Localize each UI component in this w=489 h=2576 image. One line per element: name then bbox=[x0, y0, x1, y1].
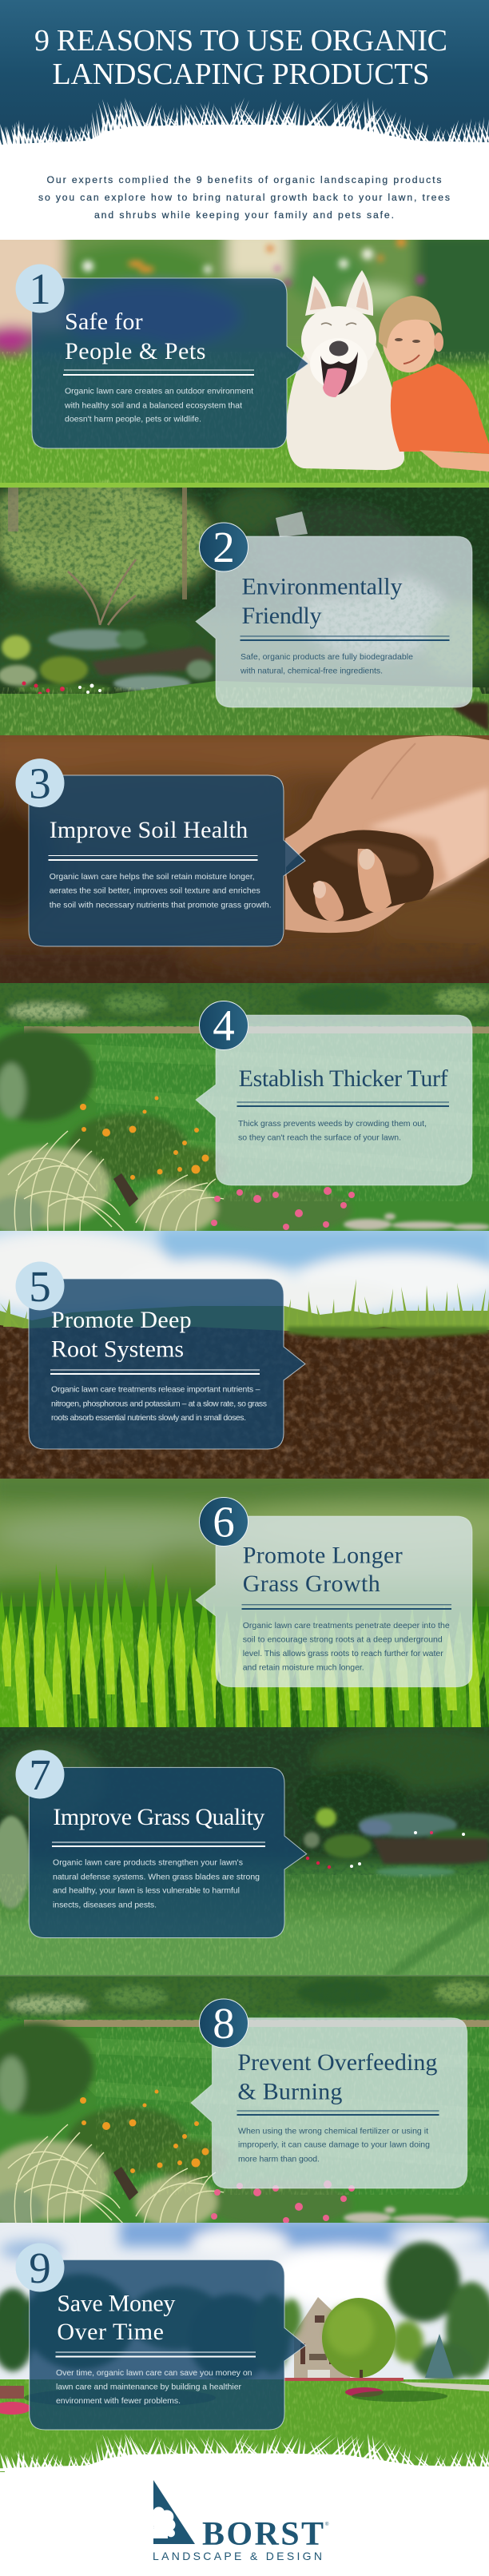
logo wordmark bbox=[153, 2516, 329, 2562]
body text bbox=[53, 1857, 260, 1910]
number badge 5 bbox=[16, 1261, 64, 1311]
ornamental grass strands bbox=[8, 1131, 224, 1231]
photo: wooded garden and lawn bbox=[0, 1718, 489, 1990]
body text: the soil with necessary nutrients that promote grass growth. bbox=[50, 900, 272, 910]
hand bbox=[285, 735, 489, 933]
logo wordmark: BORST bbox=[202, 2516, 324, 2553]
heading bbox=[241, 574, 403, 629]
heading: Safe for bbox=[65, 309, 143, 335]
number badge 3: 3 bbox=[29, 759, 51, 808]
body text bbox=[240, 652, 413, 675]
bright lime blades bbox=[2, 1599, 481, 1727]
body text: with healthy soil and a balanced ecosystem that bbox=[64, 401, 242, 411]
photo: striped lawn and flower bed bbox=[0, 1973, 489, 2228]
heading: Prevent Overfeeding bbox=[237, 2049, 437, 2076]
body text: Thick grass prevents weeds by crowding them out, bbox=[238, 1119, 427, 1129]
number badge 9 bbox=[16, 2243, 64, 2292]
body text: more harm than good. bbox=[238, 2155, 320, 2164]
body text: Organic lawn care treatments release important nutrients – bbox=[51, 1384, 260, 1394]
body text: insects, diseases and pests. bbox=[53, 1901, 157, 1910]
photo: sky, grass and soil cross-section bbox=[0, 1227, 489, 1479]
photo: house with trees and lawn bbox=[0, 2218, 489, 2472]
heading: Grass Growth bbox=[243, 1571, 380, 1597]
grass silhouette bbox=[0, 98, 489, 152]
callout: save money over time bbox=[16, 2243, 305, 2430]
title: LANDSCAPING PRODUCTS bbox=[53, 58, 430, 91]
callout: improve grass quality bbox=[16, 1750, 307, 1937]
number badge 8 bbox=[200, 1999, 248, 2048]
number badge 8: 8 bbox=[213, 1999, 235, 2048]
heading: & Burning bbox=[237, 2078, 342, 2104]
number badge 5: 5 bbox=[29, 1262, 51, 1311]
body text: Safe, organic products are fully biodegradable bbox=[241, 652, 413, 662]
heading bbox=[51, 1307, 192, 1362]
footer grass silhouette bbox=[0, 2433, 489, 2473]
house bbox=[294, 2297, 352, 2386]
mid green blades bbox=[0, 1563, 489, 1727]
callout: establish thicker turf bbox=[196, 1001, 472, 1185]
body text bbox=[51, 1384, 267, 1423]
intro text: so you can explore how to bring natural growth back to your lawn, trees bbox=[38, 192, 450, 203]
boy bbox=[379, 296, 489, 472]
body text: and healthy, your lawn is less vulnerable to harmful bbox=[53, 1886, 240, 1896]
body text: nitrogen, phosphorous and potassium – at a slow rate, so grass bbox=[51, 1399, 267, 1408]
body text: environment with fewer problems. bbox=[56, 2396, 181, 2406]
heading: Promote Longer bbox=[243, 1543, 403, 1568]
logo wordmark: LANDSCAPE & DESIGN bbox=[153, 2550, 322, 2562]
body text: improperly, it can cause damage to your lawn doing bbox=[238, 2140, 430, 2150]
photo: close-up of tall grass blades bbox=[0, 1471, 489, 1742]
number badge 4: 4 bbox=[213, 1001, 235, 1050]
title: 9 REASONS TO USE ORGANIC bbox=[34, 24, 447, 58]
heading bbox=[65, 309, 205, 364]
panel: reason 3 improve soil health bbox=[0, 735, 489, 983]
callout: promote longer grass growth bbox=[196, 1498, 472, 1687]
body text bbox=[238, 2126, 430, 2164]
body text: with natural, chemical-free ingredients. bbox=[240, 666, 383, 675]
body text: lawn care and maintenance by building a healthier bbox=[56, 2382, 241, 2391]
body text bbox=[56, 2368, 252, 2406]
panel: reason 7 improve grass quality bbox=[0, 1727, 489, 1975]
logo: Borst Landscape & Design bbox=[153, 2480, 329, 2562]
body text bbox=[238, 1119, 427, 1143]
logo wordmark: ® bbox=[325, 2522, 329, 2527]
body text bbox=[243, 1621, 450, 1672]
intro text: and shrubs while keeping your family and pets safe. bbox=[94, 209, 394, 221]
number badge 1 bbox=[16, 264, 64, 313]
number badge 7: 7 bbox=[29, 1750, 51, 1799]
callout: environmentally friendly bbox=[196, 523, 472, 707]
number badge 6: 6 bbox=[213, 1498, 235, 1546]
heading bbox=[237, 2049, 437, 2104]
heading: Promote Deep bbox=[51, 1307, 192, 1333]
number badge 1: 1 bbox=[29, 265, 51, 313]
dark shadow blades bbox=[29, 1638, 489, 1727]
panel: reason 4 establish thicker turf bbox=[0, 983, 489, 1231]
body text bbox=[50, 872, 272, 910]
number badge 7 bbox=[16, 1750, 64, 1799]
photo: garden with tree and stone wall bbox=[0, 480, 489, 735]
panel: reason 6 promote longer grass growth bbox=[0, 1479, 489, 1727]
body text: so they can't reach the surface of your lawn. bbox=[238, 1133, 401, 1143]
heading bbox=[243, 1543, 403, 1597]
intro text bbox=[38, 174, 450, 221]
body text: Organic lawn care helps the soil retain moisture longer, bbox=[50, 872, 255, 882]
intro text: Our experts complied the 9 benefits of organic landscaping products bbox=[46, 174, 441, 185]
body text bbox=[64, 387, 253, 424]
callout: prevent overfeeding and burning bbox=[191, 1999, 467, 2188]
heading: Establish Thicker Turf bbox=[239, 1065, 448, 1092]
number badge 2: 2 bbox=[213, 523, 235, 571]
heading: People & Pets bbox=[65, 338, 205, 364]
panel: reason 5 promote deep root systems bbox=[0, 1231, 489, 1479]
callout: improve soil health bbox=[16, 758, 305, 946]
photo: striped lawn and flower bed bbox=[0, 979, 489, 1235]
callout: safe for people and pets bbox=[16, 264, 308, 448]
number badge 2 bbox=[200, 523, 248, 571]
logo mark: triangle with tree bbox=[150, 2480, 195, 2546]
body text: natural defense systems. When grass blades are strong bbox=[53, 1872, 260, 1881]
body text: level. This allows grass roots to reach further for water bbox=[243, 1649, 443, 1658]
panel: reason 8 prevent overfeeding and burning bbox=[0, 1975, 489, 2223]
body text: Organic lawn care treatments penetrate deeper into the bbox=[243, 1621, 450, 1630]
heading: Improve Grass Quality bbox=[53, 1804, 264, 1830]
title bbox=[34, 24, 447, 91]
panel: reason 2 environmentally friendly bbox=[0, 488, 489, 735]
photo: dog and boy on lawn bbox=[0, 228, 489, 488]
header banner bbox=[0, 0, 489, 221]
body text: doesn't harm people, pets or wildlife. bbox=[65, 414, 201, 424]
body text: When using the wrong chemical fertilizer or using it bbox=[238, 2126, 428, 2136]
body text: Over time, organic lawn care can save you money on bbox=[56, 2368, 252, 2378]
body text: roots absorb essential nutrients slowly and in small doses. bbox=[51, 1413, 246, 1423]
photo: hand holding soil bbox=[0, 727, 489, 995]
body text: soil to encourage strong roots at a deep underground bbox=[243, 1635, 443, 1645]
heading: Save Money bbox=[57, 2291, 175, 2317]
body text: Organic lawn care products strengthen your lawn's bbox=[53, 1857, 243, 1867]
body text: Organic lawn care creates an outdoor environment bbox=[65, 387, 253, 396]
heading: Environmentally bbox=[241, 574, 403, 600]
heading bbox=[57, 2291, 175, 2345]
heading: Improve Soil Health bbox=[50, 817, 248, 843]
heading: Root Systems bbox=[51, 1336, 184, 1362]
panel: reason 9 save money over time bbox=[0, 2223, 489, 2472]
heading: Friendly bbox=[241, 603, 321, 629]
heading: Over Time bbox=[57, 2319, 164, 2345]
number badge 4 bbox=[200, 1001, 248, 1050]
body text: aerates the soil better, improves soil texture and enriches bbox=[50, 886, 260, 895]
dog bbox=[286, 270, 404, 470]
body text: and retain moisture much longer. bbox=[243, 1662, 364, 1672]
callout: promote deep root systems bbox=[16, 1261, 305, 1449]
panel: reason 1 safe for people and pets bbox=[0, 240, 489, 488]
number badge 3 bbox=[16, 758, 64, 808]
number badge 9: 9 bbox=[29, 2244, 51, 2292]
number badge 6 bbox=[200, 1498, 248, 1546]
